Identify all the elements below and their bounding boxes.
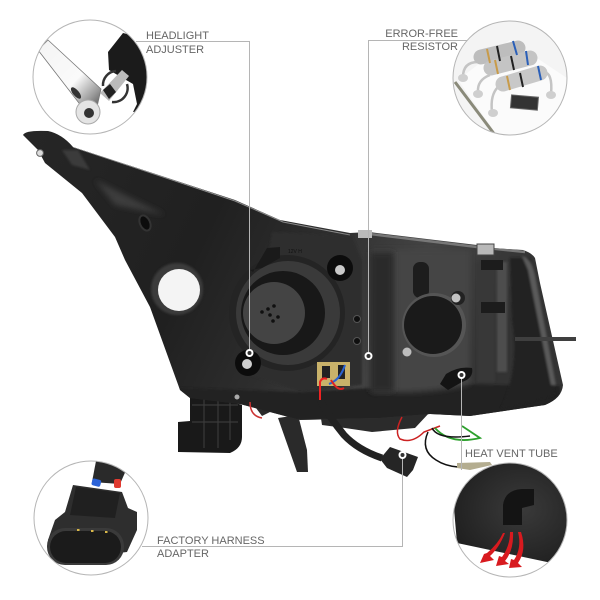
right frame top rim: [370, 234, 525, 252]
resistor chip: [510, 95, 538, 110]
rotation arrows: [103, 71, 128, 102]
connector body: [48, 485, 137, 552]
fog window: [151, 263, 203, 315]
housing body: [23, 131, 563, 420]
resistor leads: [463, 62, 551, 112]
harness plug: [380, 447, 418, 477]
connector pins: [77, 529, 108, 533]
wire terminal: [457, 462, 492, 470]
harness cable: [320, 365, 382, 458]
right panel bulb cap: [402, 262, 466, 357]
vent elbow: [503, 489, 534, 525]
label: headlight adjuster: HEADLIGHT: [146, 30, 209, 42]
connector mouth: [47, 528, 124, 565]
bolt upper right: [327, 255, 353, 281]
mounting screw: [37, 150, 43, 156]
label: factory harness adapter: FACTORY HARNESS: [157, 535, 265, 547]
right panel: [378, 267, 470, 394]
callout: heat vent tube: [450, 463, 570, 577]
yellow connector: [317, 362, 350, 386]
lower bracket: [178, 388, 242, 453]
circuit board edge: [455, 82, 495, 135]
airflow arrows: [480, 532, 523, 568]
lens label: 12V H: [288, 249, 302, 255]
cap retainer clip: [250, 247, 280, 272]
bracket screw: [234, 394, 240, 400]
resistor bodies: [481, 48, 540, 84]
label: headlight adjuster: ADJUSTER: [146, 44, 204, 56]
label: error-free resistor: RESISTOR: [402, 41, 458, 53]
callout: error-free resistor: [453, 21, 570, 135]
headlight assembly: [23, 131, 576, 477]
lower band: [180, 384, 560, 420]
label: factory harness adapter: ADAPTER: [157, 548, 209, 560]
side studs: [354, 316, 360, 344]
socket extension: [100, 70, 129, 101]
right panel bolts: [402, 291, 465, 356]
leader end markers: [246, 350, 464, 458]
bolt lower left: [235, 350, 261, 376]
antenna rod: [515, 337, 576, 341]
red wire: [114, 479, 121, 488]
solder pads: [458, 74, 556, 117]
housing hole: [137, 214, 153, 232]
leader lines: [136, 40, 468, 546]
mounting tab: [62, 150, 90, 170]
bracket clips right panel: [481, 260, 505, 313]
callout: factory harness adapter: [34, 461, 148, 575]
centre raised panel: [294, 234, 362, 391]
soft body highlight: [98, 182, 158, 214]
wrench handle: [38, 40, 101, 107]
vent tube slot: [440, 368, 472, 390]
adjuster housing: [108, 33, 150, 112]
dark left strip of right panel: [370, 252, 394, 392]
centre fin: [278, 415, 308, 472]
cable sleeve: [92, 461, 127, 484]
label: heat vent tube: HEAT VENT TUBE: [465, 448, 558, 460]
thin wires: [250, 402, 480, 467]
outer ribs: [496, 256, 556, 386]
wrench head: [76, 100, 100, 124]
label: error-free resistor: ERROR-FREE: [385, 28, 458, 40]
housing top highlight: [73, 147, 350, 235]
lower mounts: [250, 400, 430, 432]
blue wire: [92, 478, 102, 487]
resistor bands: [487, 41, 541, 90]
callout: headlight adjuster: [33, 20, 150, 134]
clips on rim: [358, 230, 494, 255]
bulb cap: [229, 255, 345, 371]
vent housing: [450, 463, 570, 565]
